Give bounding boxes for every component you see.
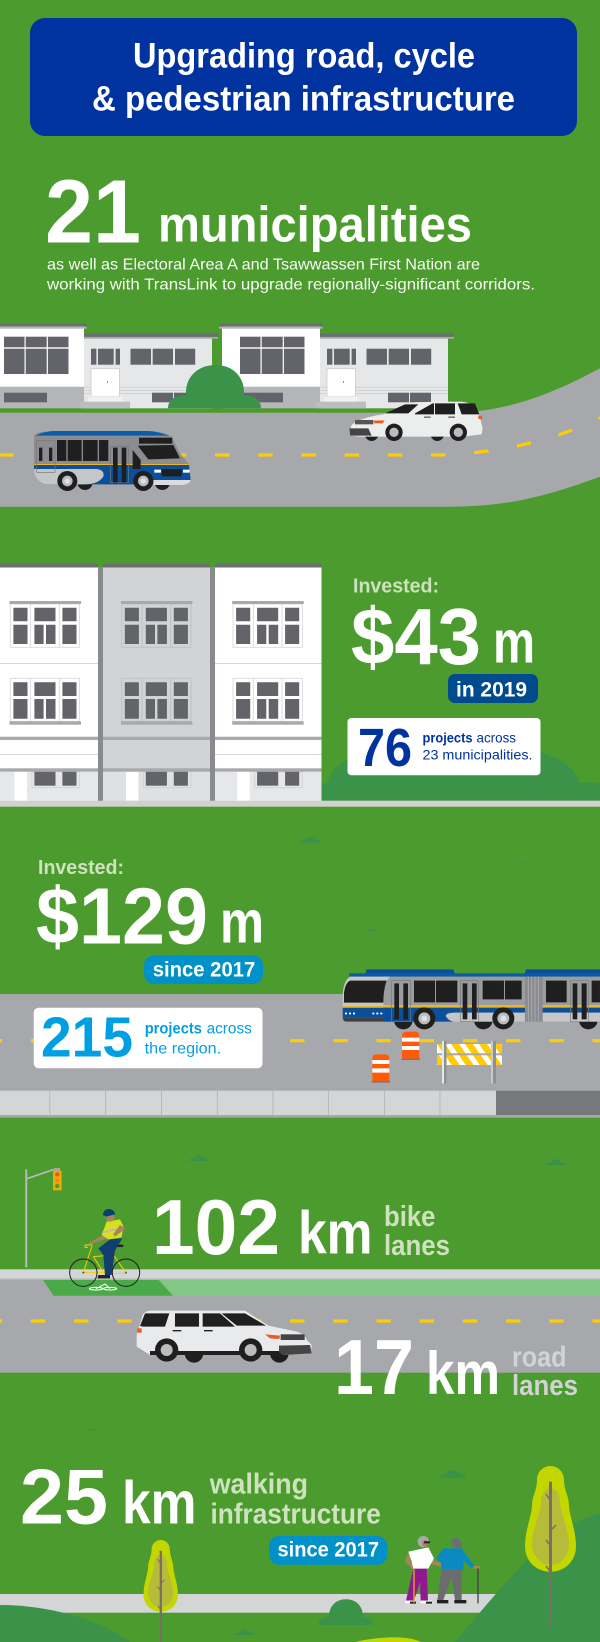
street with bike lane [0, 1269, 600, 1373]
small background shrubs, middle [188, 1155, 568, 1165]
hills [0, 1513, 600, 1642]
title banner: & pedestrian infrastructure [92, 80, 515, 119]
stat: 21 municipalities: municipalities [158, 197, 472, 253]
stat: $129 m since 2017: m [220, 889, 264, 956]
cone rear [401, 1032, 420, 1060]
man [436, 1538, 480, 1603]
woman [405, 1536, 447, 1604]
box: 76 projects: across [476, 730, 516, 746]
houses row [0, 323, 454, 408]
box: 215 projects [34, 1006, 263, 1070]
white SUV [349, 402, 483, 441]
stat: 17 km road lanes: lanes [512, 1370, 578, 1402]
pill: since 2017: since 2017 [278, 1539, 379, 1562]
stat: $43 m in 2019: $43 [351, 592, 481, 681]
box: 215 projects: 215 [41, 1006, 133, 1070]
white SUV, lower [137, 1311, 312, 1363]
stat: 25 km walking infrastructure: km [122, 1469, 196, 1536]
cyclist [70, 1209, 140, 1290]
shrub [168, 365, 261, 408]
stat: 25 km walking infrastructure [20, 1452, 387, 1565]
stat: 21 municipalities: 21 [45, 163, 141, 263]
title banner [30, 18, 577, 136]
cone front [372, 1054, 390, 1083]
stat: 17 km road lanes: road [512, 1342, 566, 1374]
stat: 102 km bike lanes: 102 [152, 1183, 280, 1271]
box: 76 projects: 23 municipalities. [422, 746, 532, 762]
two pedestrians with canes [405, 1536, 480, 1604]
lime dome at bottom edge [356, 1637, 421, 1642]
apartment building [0, 564, 322, 801]
shrub on path [318, 1599, 373, 1625]
stat: $129 m since 2017: $129 [36, 871, 208, 960]
road centre line [0, 418, 600, 455]
box: 76 projects: projects [422, 730, 473, 746]
stat: 102 km bike lanes: bike [384, 1201, 436, 1233]
tree small [143, 1540, 178, 1642]
sidewalk slabs [0, 1091, 600, 1118]
stat: 102 km bike lanes [152, 1183, 450, 1271]
stat: $43 m in 2019: m [493, 608, 535, 675]
box: 215 projects: projects [145, 1020, 202, 1037]
stat: $43 m in 2019: Invested: [353, 576, 439, 598]
shrub behind project box [322, 742, 600, 801]
walking path [0, 1594, 498, 1613]
box: 215 projects: across [207, 1020, 252, 1037]
stat: 21 municipalities [45, 163, 535, 293]
barricade [437, 1041, 502, 1083]
small background shrubs, upper [298, 837, 322, 843]
curved road [0, 368, 600, 507]
pill: in 2019: in 2019 [456, 679, 527, 702]
stat: $129 m since 2017 [36, 857, 264, 984]
pill: in 2019 [448, 674, 538, 703]
stat: 17 km road lanes: 17 [334, 1323, 414, 1411]
stat: 21 municipalities: as well as Electoral Area A and Tsawwassen First Nation are [47, 256, 480, 273]
stat: 17 km road lanes: km [426, 1340, 500, 1407]
road under construction [0, 994, 600, 1118]
box: 76 projects [348, 718, 540, 778]
bike lane symbol [89, 1284, 117, 1290]
box: 76 projects: 76 [358, 718, 412, 778]
stat: 102 km bike lanes: lanes [384, 1230, 450, 1262]
stat: 25 km walking infrastructure: walking [209, 1468, 308, 1500]
box: 215 projects: the region. [145, 1040, 221, 1057]
stat: 17 km road lanes [334, 1323, 578, 1411]
articulated bus [343, 969, 600, 1029]
title banner: Upgrading road, cycle [133, 37, 475, 76]
stat: 21 municipalities: working with TransLink to upgrade regionally-significant corridors. [46, 276, 535, 293]
sidewalk [0, 801, 600, 807]
tree large [525, 1466, 576, 1627]
traffic light [25, 1168, 62, 1267]
small background shrubs, lower [88, 1429, 467, 1635]
street scene: houses, road, bus, car [0, 323, 600, 507]
stat: 102 km bike lanes: km [298, 1199, 372, 1266]
traffic cones [372, 1032, 420, 1083]
stat: 25 km walking infrastructure: infrastructure [210, 1498, 381, 1530]
stat: $129 m since 2017: Invested: [38, 857, 124, 879]
pill: since 2017: since 2017 [153, 959, 255, 982]
community shuttle bus [34, 431, 191, 491]
stat: $43 m in 2019 [351, 576, 538, 703]
stat: 25 km walking infrastructure: 25 [20, 1452, 108, 1540]
